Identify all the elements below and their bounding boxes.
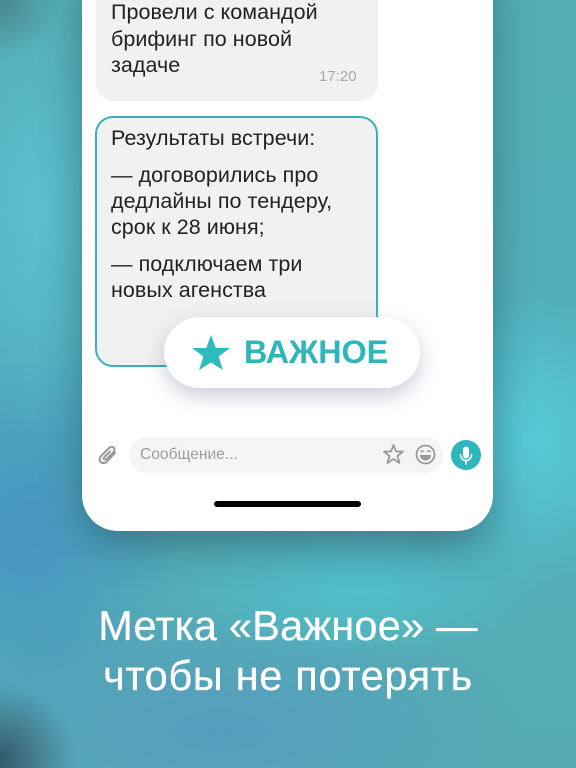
important label pill [164,317,420,388]
message input field [129,437,443,473]
headline: чтобы не потерять [103,652,473,699]
icon: microphone button [451,440,481,470]
icon: star [192,335,230,370]
headline: Метка «Важное» — [98,602,478,649]
message bubble: briefing [96,0,378,101]
meeting results text [111,126,332,302]
input placeholder: Сообщение... [140,446,238,463]
phone screen [82,0,493,531]
label text: ВАЖНОЕ [244,334,388,370]
message time: 17:20 [319,68,357,85]
icon: paperclip [98,446,116,464]
message text [111,0,318,77]
meeting results text: новых агенства [111,278,266,302]
meeting results text: — подключаем три [111,252,302,276]
home indicator [214,501,361,507]
meeting results text: Результаты встречи: [111,126,315,150]
message text: задаче [111,53,180,77]
meeting results text: дедлайны по тендеру, [111,189,332,213]
headline [98,602,478,699]
meeting results text: срок к 28 июня; [111,215,265,239]
message bubble: meeting results, highlighted [95,116,378,367]
message text: Провели с командой [111,0,318,24]
meeting results text: — договорились про [111,163,318,187]
icon: star outline [383,444,404,464]
icon: smiley [416,444,436,464]
message text: брифинг по новой [111,27,292,51]
